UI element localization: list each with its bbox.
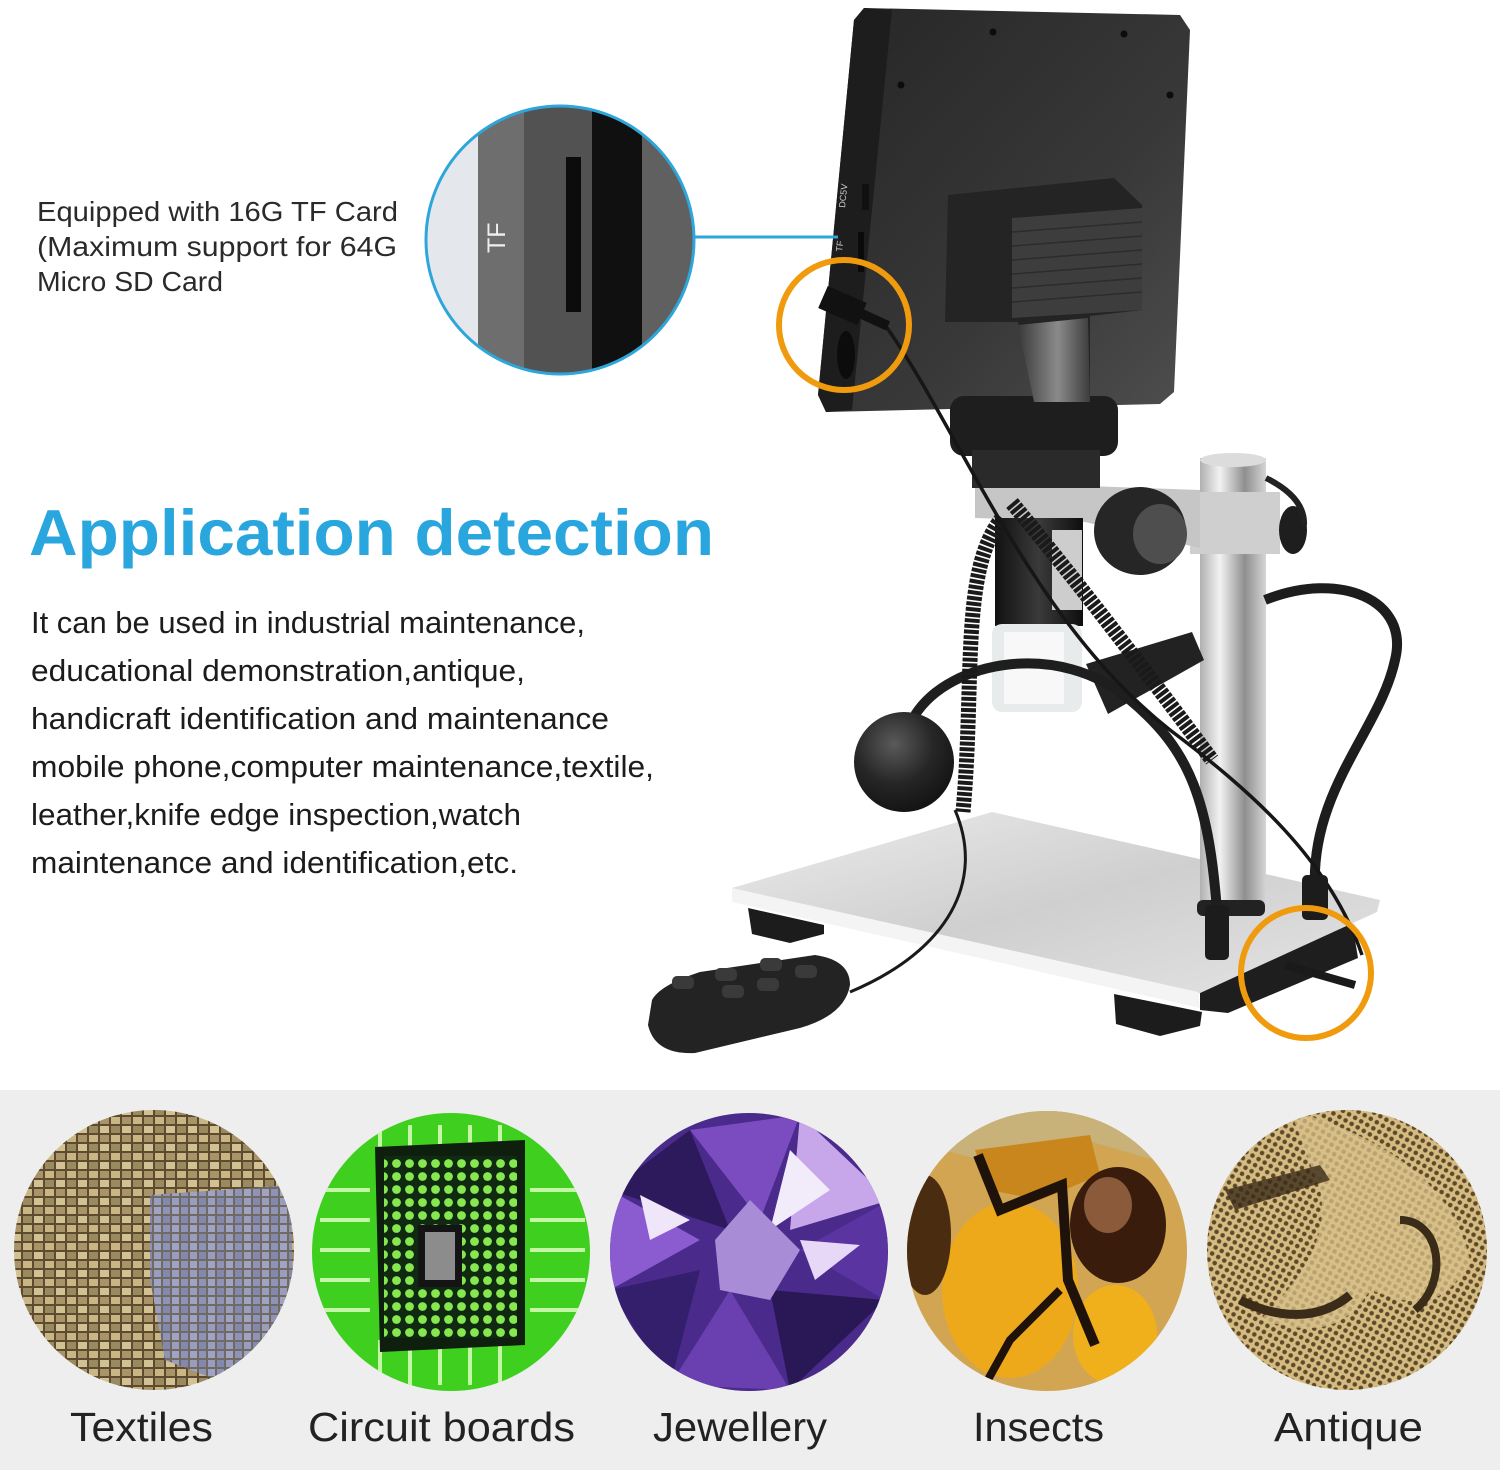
sample: insects: Insects (973, 1404, 1104, 1450)
panel: applications strip (0, 1090, 1500, 1470)
text block: application description (31, 605, 654, 880)
microscope product photo (648, 8, 1397, 1053)
sample: jewellery: Jewellery (653, 1404, 828, 1450)
gooseneck lights and cables (823, 297, 1397, 992)
stand feet for gooseneck (1302, 875, 1328, 920)
monitor back (818, 8, 1190, 412)
text block: application description: leather,knife edge inspection,watch (31, 797, 521, 832)
sample: circuit boards (308, 1110, 595, 1450)
sample: antique: Antique (1274, 1404, 1423, 1450)
text block: application description: maintenance and identification,etc. (31, 845, 518, 880)
monitor back: TF (834, 240, 845, 252)
text block: TF card note (37, 196, 398, 297)
wired remote (648, 955, 850, 1053)
sample: jewellery (605, 1110, 895, 1450)
base plate (732, 812, 1380, 1036)
heading: Application detection: Application detection (29, 496, 714, 569)
text block: application description: It can be used in industrial maintenance, (31, 605, 585, 640)
monitor mount (945, 178, 1142, 488)
sample: textiles (10, 1105, 300, 1450)
sample: antique (1205, 1108, 1490, 1450)
sample: circuit boards: Circuit boards (308, 1404, 575, 1450)
callout: orange ring at base port (1241, 908, 1371, 1038)
arm and focus knob (975, 482, 1200, 575)
text block: application description: educational demonstration,antique, (31, 653, 525, 688)
text block: application description: mobile phone,computer maintenance,textile, (31, 749, 654, 784)
support column (1190, 453, 1307, 916)
leader line from TF slot to inset (694, 236, 838, 238)
inset: TF card slot close-up (425, 105, 697, 375)
text block: application description: handicraft identification and maintenance (31, 701, 609, 736)
text block: TF card note: Micro SD Card (37, 266, 223, 297)
lens body (992, 518, 1204, 714)
callout: orange ring at monitor power port (779, 260, 909, 390)
sample: insects (899, 1110, 1190, 1450)
monitor back: DC5V (837, 183, 849, 208)
lamp head (854, 712, 954, 812)
sample: textiles: Textiles (70, 1404, 213, 1450)
text block: TF card note: (Maximum support for 64G (37, 231, 397, 262)
text block: TF card note: Equipped with 16G TF Card (37, 196, 398, 227)
inset: TF card slot close-up: TF (483, 222, 511, 253)
